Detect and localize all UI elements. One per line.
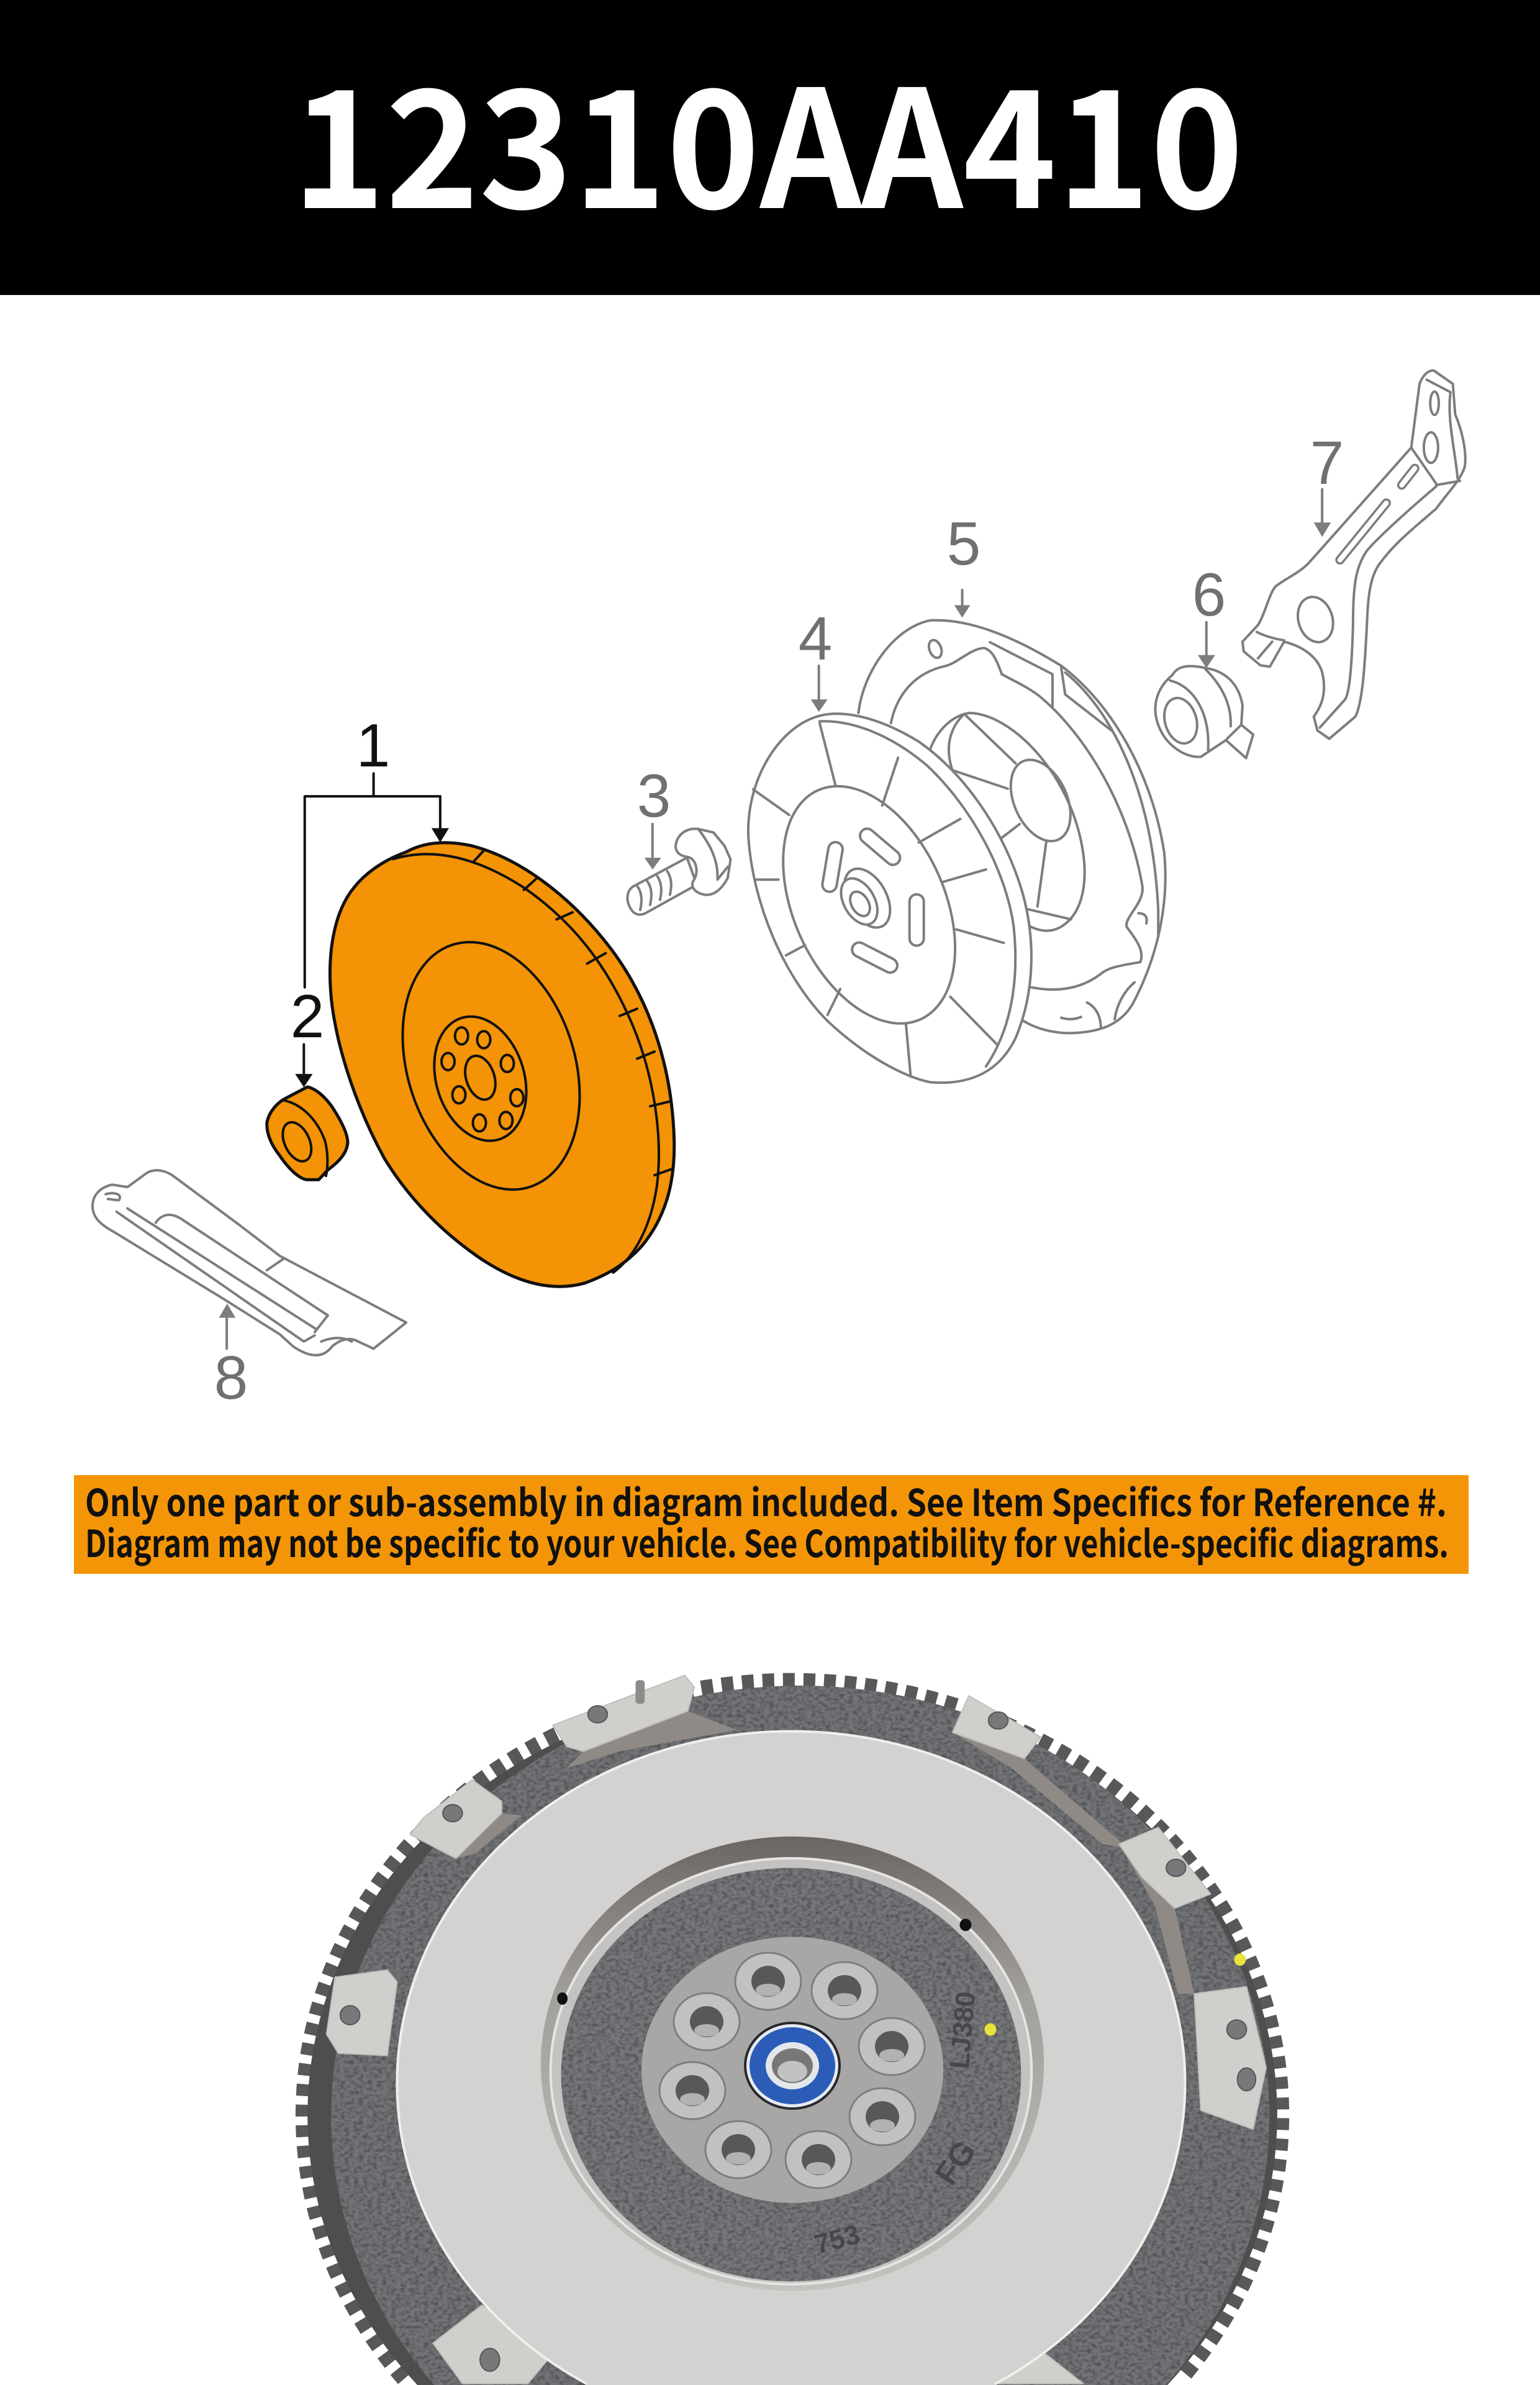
cast markings: LJ380	[944, 1990, 981, 2070]
dark ring gear base	[307, 1689, 1277, 2385]
machined pads	[327, 1675, 1266, 2384]
cast markings: 753	[811, 2219, 863, 2260]
part 7: release fork	[1243, 371, 1465, 738]
part 8: cover plate	[93, 1170, 406, 1355]
title bar	[0, 0, 1540, 295]
exploded parts diagram	[93, 371, 1465, 1412]
title: part number: 12310AA410	[292, 19, 1244, 255]
hub bolt holes	[659, 1953, 925, 2188]
part 1: flywheel (highlighted)	[330, 843, 674, 1286]
ring gear teeth	[304, 1681, 1281, 2379]
cast markings	[811, 1990, 984, 2260]
callout numbers: 5	[947, 509, 981, 578]
flywheel product photo	[304, 1675, 1281, 2385]
callout numbers	[214, 429, 1344, 1412]
drill marks and yellow paint dots	[557, 1919, 1246, 2035]
centre hub	[641, 1937, 943, 2203]
plate recess	[541, 1837, 1044, 2291]
part 2: pilot bushing (highlighted)	[267, 1087, 348, 1179]
cast ring	[331, 1686, 1269, 2385]
callout numbers: 3	[637, 761, 671, 830]
arrows: labels 1 and 2	[295, 773, 449, 1088]
machined walls beside the pads	[456, 1711, 1194, 1994]
callout numbers: 2	[291, 982, 324, 1050]
callout numbers: 4	[799, 604, 832, 673]
blue pilot bearing	[744, 2022, 841, 2110]
part 4: clutch disc	[748, 666, 1031, 1083]
part 6: release bearing	[1156, 622, 1253, 758]
part 5: clutch cover	[858, 590, 1166, 1033]
callout numbers: 7	[1310, 429, 1344, 497]
notice banner	[74, 1473, 1469, 1574]
part 3: bolt	[627, 824, 730, 915]
friction plate	[397, 1732, 1185, 2385]
callout numbers: 1	[356, 711, 390, 779]
cast centre	[561, 1868, 1021, 2281]
cast markings: FG	[928, 2134, 984, 2191]
callout numbers: 8	[214, 1343, 248, 1412]
callout numbers: 6	[1192, 560, 1226, 629]
